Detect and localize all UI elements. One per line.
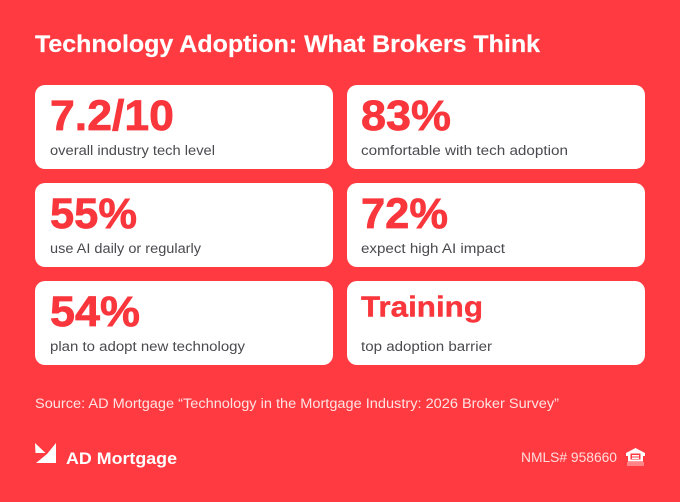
icon: logo mark [35, 443, 56, 463]
label: expect high AI impact: expect high AI impact [361, 241, 505, 256]
label: plan to adopt new technology: plan to adopt new technology [50, 339, 245, 354]
label: top adoption barrier: top adoption barrier [361, 339, 493, 354]
icon: equal housing [626, 448, 645, 466]
stat: 54%: 54% [50, 288, 140, 336]
label: comfortable with tech adoption: comfortable with tech adoption [361, 143, 568, 158]
NMLS number: NMLS# 958660 [521, 450, 617, 465]
stat: Training: Training [361, 292, 483, 324]
panel: comfortable with tech [347, 85, 645, 169]
stat: 72%: 72% [361, 190, 448, 238]
panel: plan to adopt [35, 281, 333, 365]
stat: 55%: 55% [50, 190, 137, 238]
panel: overall tech level [35, 85, 333, 169]
panel: AI daily use [35, 183, 333, 267]
source note: Source: AD Mortgage “Technology in the Mortgage Industry: 2026 Broker Survey” [35, 396, 559, 411]
panel: top barrier [347, 281, 645, 365]
stat: 83%: 83% [361, 92, 451, 140]
label: overall industry tech level: overall industry tech level [50, 143, 215, 158]
label: use AI daily or regularly: use AI daily or regularly [50, 241, 201, 256]
title: Technology Adoption: What Brokers Think [35, 31, 541, 58]
stat: 7.2/10: 7.2/10 [50, 92, 174, 140]
panel: AI impact [347, 183, 645, 267]
logo: AD Mortgage [35, 443, 177, 468]
brand name: AD Mortgage [66, 449, 177, 468]
